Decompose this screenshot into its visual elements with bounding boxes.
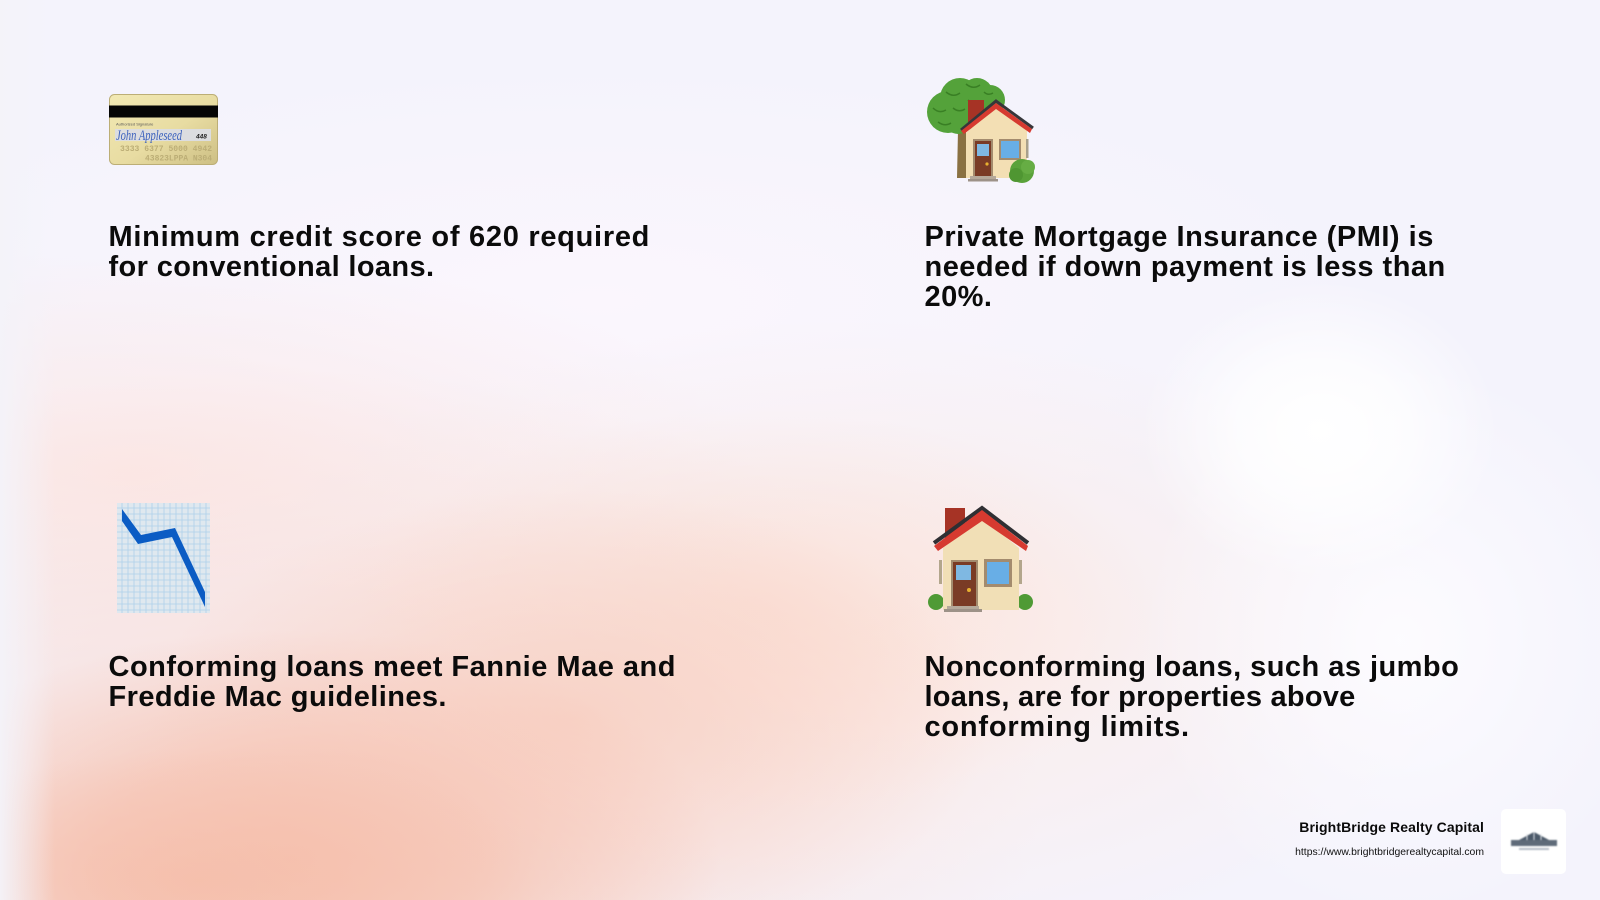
brand url: https://www.brightbridgerealtycapital.com [1295,847,1484,858]
text: nonconforming loans [924,651,1459,743]
text: PMI: Private Mortgage Insurance (PMI) is [924,221,1434,253]
text: credit score [108,221,650,283]
icon: house [928,506,1033,612]
icon: credit card: 3333 6377 5000 4942 [120,145,212,154]
icon: chart with downward trend [117,503,210,613]
logo tile [1501,809,1566,874]
brand name: BrightBridge Realty Capital [1299,819,1484,835]
text: conforming loans: Freddie Mac guidelines. [108,681,447,713]
icon: credit card: 43823LPPA N304 [145,154,212,164]
text: nonconforming loans: Nonconforming loans, such as jumbo [924,651,1459,683]
text: PMI: 20%. [924,281,992,313]
icon: logo [1510,832,1558,851]
icon: credit card: Authorized Signature [116,122,154,126]
text: nonconforming loans: loans, are for properties above [924,681,1356,713]
icon: credit card: John Appleseed [116,128,182,144]
icon: house with tree [927,78,1035,183]
text: credit score: Minimum credit score of 620 required [108,221,650,253]
text: PMI [924,221,1446,313]
icon: credit card: 448 [195,134,207,140]
text: nonconforming loans: conforming limits. [924,711,1190,743]
text: conforming loans [108,651,676,713]
icon: credit card [109,94,218,165]
text: PMI: needed if down payment is less than [924,251,1446,283]
text: credit score: for conventional loans. [108,251,434,283]
text: conforming loans: Conforming loans meet Fannie Mae and [108,651,676,683]
